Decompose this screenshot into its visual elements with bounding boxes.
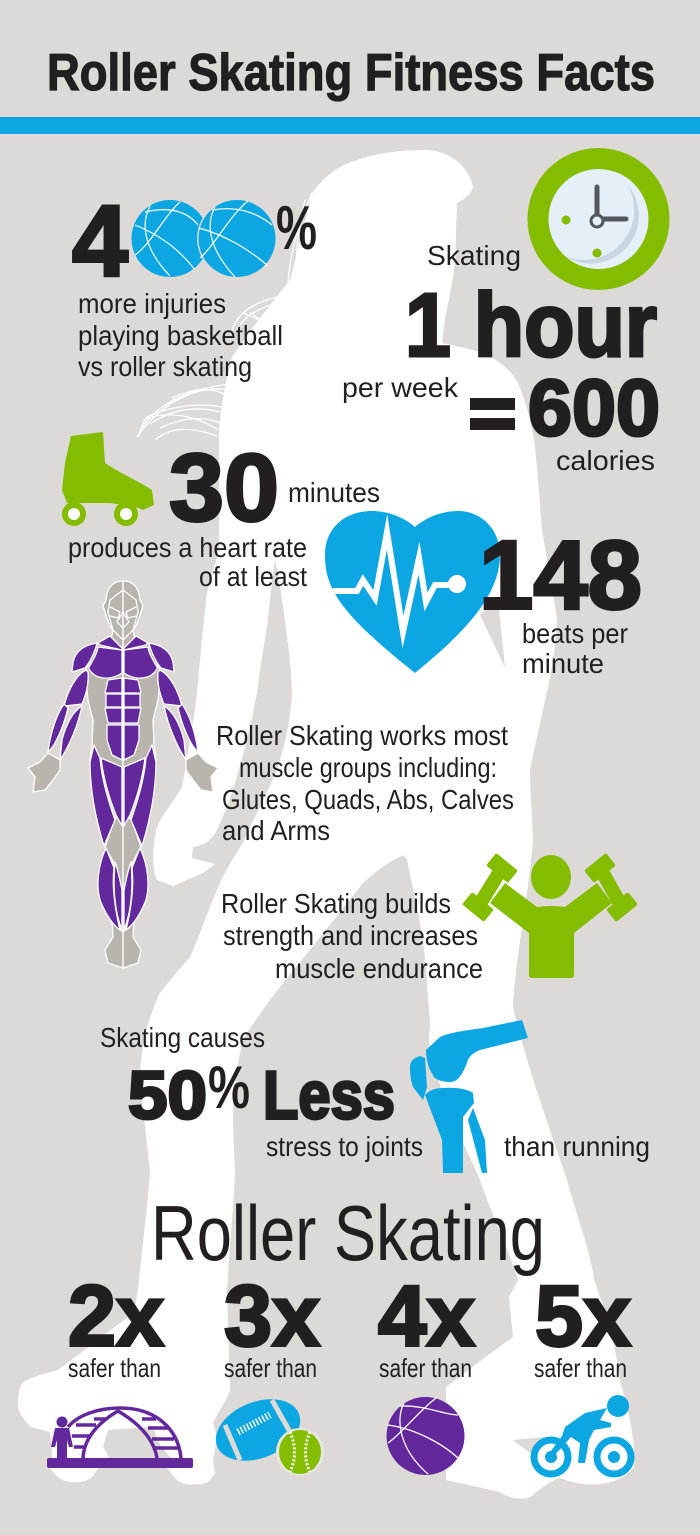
big 5x: 5x (535, 1268, 631, 1364)
equals sign (470, 398, 515, 430)
muscle groups text: muscle groups including: (239, 752, 497, 783)
skater silhouette (18, 150, 634, 1499)
big 50% Less (128, 1054, 395, 1134)
injuries caption: more injuries (78, 288, 226, 319)
safety: 4x (378, 1268, 475, 1475)
stat: 400% more injuries (72, 186, 317, 382)
big 50% Less: % (208, 1054, 250, 1121)
safer than: safer than (534, 1353, 627, 1383)
strength text: strength and increases (223, 920, 478, 951)
injuries caption: playing basketball (78, 320, 283, 351)
heart rate caption: of at least (199, 561, 307, 592)
icon: heart with pulse (325, 511, 500, 673)
strength text: muscle endurance (275, 953, 483, 984)
injuries caption: vs roller skating (78, 351, 252, 382)
icon: cyclist (534, 1395, 631, 1474)
hair strands (137, 193, 312, 440)
icon: roller skate (62, 432, 154, 523)
icon: basketballs (132, 198, 277, 278)
big 30: 30 (169, 434, 279, 542)
calories: calories (556, 445, 655, 476)
big 1 hour: 1 hour (405, 276, 657, 376)
safer than: safer than (379, 1353, 472, 1383)
heart rate caption: produces a heart rate (68, 532, 307, 563)
stat: 30 minutes heart rate (62, 432, 642, 679)
big number 4: 4 (72, 186, 128, 298)
muscle groups text (216, 720, 514, 846)
stat: 50% less stress to joints (100, 1020, 650, 1173)
minutes: minutes (288, 477, 380, 508)
figure left half (28, 581, 123, 968)
skating label: Skating (427, 240, 521, 271)
big 4x: 4x (378, 1268, 475, 1364)
than running: than running (504, 1131, 650, 1162)
skating causes: Skating causes (100, 1022, 265, 1053)
muscle groups text: Roller Skating works most (216, 720, 508, 751)
muscle groups text: and Arms (222, 815, 330, 846)
icon: playground climber (47, 1408, 193, 1468)
per week: per week (342, 372, 459, 403)
beats per minute: minute (522, 648, 604, 679)
stress to joints: stress to joints (266, 1131, 423, 1162)
icon: knee joint (410, 1020, 528, 1173)
safer than: safer than (224, 1353, 317, 1383)
safety: 5x (534, 1268, 631, 1474)
safety: 2x (47, 1268, 193, 1468)
icon: football and baseball (207, 1388, 324, 1476)
big 2x: 2x (68, 1268, 164, 1364)
big 50% Less: 50 (128, 1058, 207, 1134)
big 148: 148 (479, 520, 642, 630)
beats per minute (522, 618, 628, 679)
strength text: Roller Skating builds (221, 888, 451, 919)
blue header bar (0, 117, 700, 134)
icon: person lifting dumbbells (462, 853, 638, 978)
figure right half (123, 581, 218, 968)
injuries caption (78, 288, 283, 382)
icon: clock (528, 148, 670, 290)
safer than: safer than (68, 1353, 161, 1383)
muscle groups text: Glutes, Quads, Abs, Calves (222, 784, 514, 815)
roller skating heading: Roller Skating (151, 1189, 545, 1277)
heart rate caption (68, 532, 307, 592)
big 600: 600 (528, 363, 660, 452)
percent sign: % (276, 194, 317, 263)
icon: muscular body figure (28, 581, 218, 968)
icon: purple basketball (386, 1397, 464, 1475)
beats per minute: beats per (522, 618, 628, 649)
stat: skating 1 hour per week = 600 calories (342, 148, 670, 476)
strength text (221, 888, 483, 984)
big 3x: 3x (224, 1268, 320, 1364)
big 50% Less: Less (263, 1058, 395, 1134)
safety: 3x (207, 1268, 324, 1476)
